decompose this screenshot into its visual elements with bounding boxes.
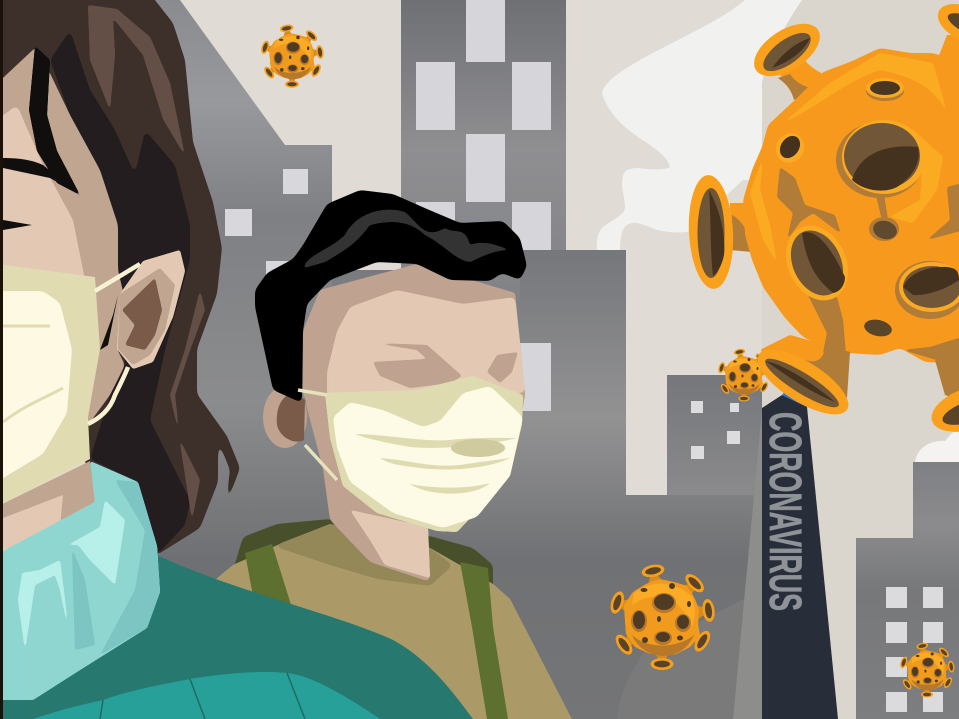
hair dark core	[50, 30, 195, 555]
face light	[0, 105, 87, 290]
small windows: right building	[691, 401, 740, 459]
small virus: top	[260, 23, 324, 88]
dark hair strand	[29, 46, 80, 195]
mid building and ground	[332, 250, 762, 719]
small virus: bottom centre	[608, 563, 716, 670]
sweater lighter panel	[33, 672, 380, 719]
spike: left	[686, 174, 755, 290]
woman sweater	[0, 555, 473, 719]
left building	[150, 0, 332, 719]
small craters	[770, 78, 904, 339]
boy neck	[303, 393, 430, 582]
boy hair	[255, 190, 527, 403]
small virus: centre	[717, 348, 771, 402]
body shadows	[777, 167, 959, 367]
spike: bottom	[748, 335, 858, 427]
shirt collar shade	[273, 524, 453, 586]
hair highlights	[304, 210, 510, 268]
small virus: bottom right	[899, 642, 955, 698]
mask straps	[88, 264, 140, 424]
woman ear	[100, 250, 185, 369]
face shadow	[0, 46, 125, 425]
small windows: left building	[225, 169, 308, 286]
spike: bottom right	[926, 355, 959, 441]
body highlights	[750, 53, 952, 263]
smoke cloud	[597, 0, 802, 252]
boy face	[303, 264, 525, 532]
lower right building	[856, 430, 959, 719]
windows: central building	[416, 0, 551, 270]
woman hair	[0, 0, 240, 555]
mask creases	[355, 434, 517, 494]
virus body	[743, 48, 959, 363]
backpack straps	[245, 544, 508, 719]
foreground curved road	[617, 590, 762, 719]
sweater seams	[100, 673, 305, 719]
boy eyes	[373, 343, 518, 388]
left margin strip	[0, 0, 3, 719]
boy backpack	[230, 519, 493, 590]
boy ear	[263, 386, 307, 448]
boy	[210, 190, 580, 719]
crater: lower left	[774, 215, 860, 311]
right mid building	[626, 375, 762, 719]
woman neck	[0, 461, 95, 555]
crater: right	[895, 261, 959, 319]
woman mask	[0, 263, 100, 510]
woman	[0, 0, 473, 719]
obelisk tower	[733, 377, 838, 719]
hair highlights	[88, 5, 205, 520]
right beige column	[762, 0, 959, 719]
woman eyelashes	[3, 158, 80, 230]
spike: top left	[745, 13, 829, 100]
mask straps	[298, 390, 337, 480]
large virus	[686, 0, 959, 441]
virus craters	[770, 78, 959, 339]
window on mid building	[520, 343, 551, 411]
woman turtleneck	[0, 461, 160, 700]
boy shirt	[210, 524, 580, 719]
tall central building	[401, 0, 566, 300]
spike: top right	[932, 0, 959, 70]
crater: large top	[836, 120, 926, 198]
boy mask	[325, 376, 523, 532]
